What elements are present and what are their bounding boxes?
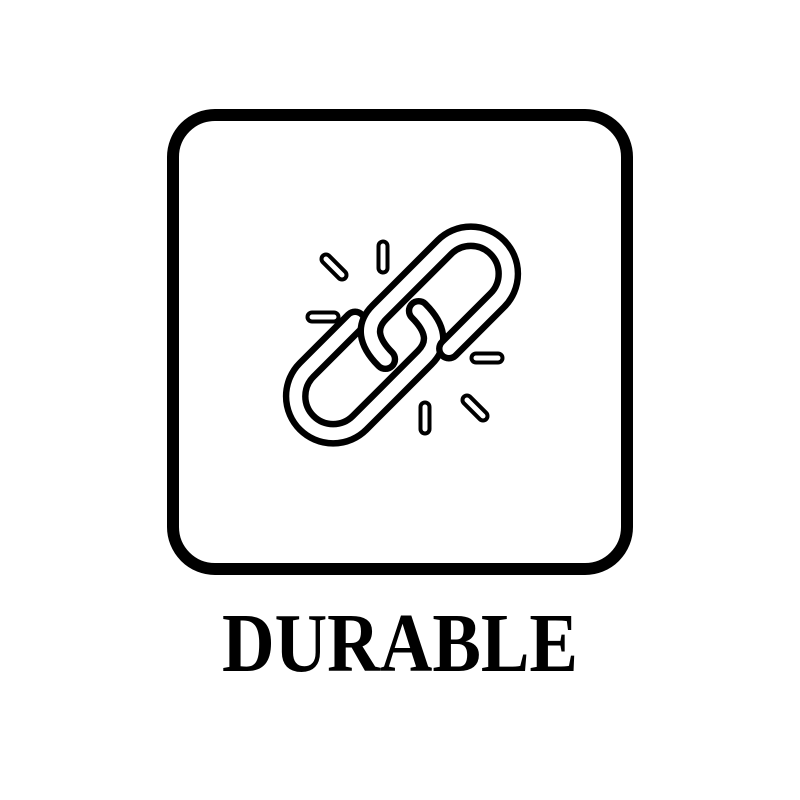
chain links	[280, 213, 524, 457]
title: DURABLE: DURABLE	[222, 597, 578, 690]
icon: broken chain	[280, 213, 524, 457]
spark dashes	[312, 246, 498, 429]
panel: rounded square frame	[173, 115, 627, 569]
